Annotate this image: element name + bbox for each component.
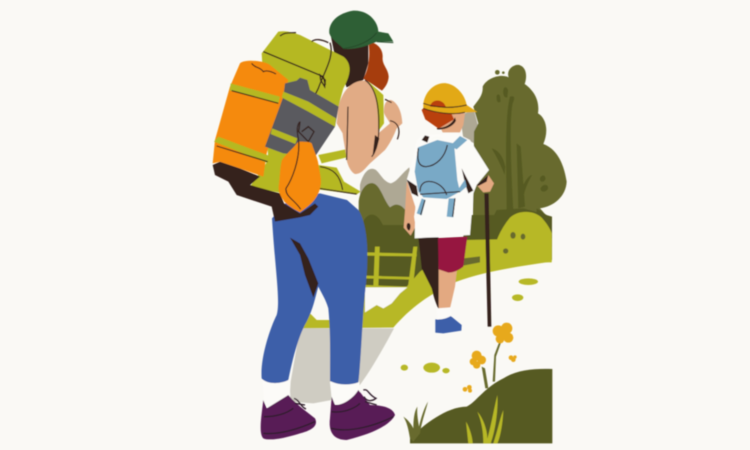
small orange bag — [279, 142, 321, 212]
right boot — [330, 390, 395, 440]
child left arm — [404, 182, 418, 236]
shirt — [407, 133, 489, 238]
large backpack — [250, 31, 350, 193]
left boot — [261, 395, 316, 439]
fence — [365, 247, 417, 287]
big tree — [473, 65, 567, 260]
child right hand — [477, 175, 494, 192]
hair — [331, 35, 368, 87]
dark grass tuft — [403, 402, 428, 442]
thigh shadow — [290, 238, 318, 298]
socks — [263, 380, 293, 412]
shoulder straps — [318, 149, 347, 163]
left bushes — [359, 183, 418, 260]
lime grass — [466, 395, 503, 443]
child — [404, 83, 494, 333]
child legs and shoe — [437, 267, 457, 310]
path shadow — [289, 328, 394, 403]
child backpack — [450, 136, 467, 149]
background hills and trees — [359, 65, 567, 260]
head and hair — [437, 110, 465, 132]
cap — [423, 83, 477, 114]
grey bottle — [265, 78, 339, 157]
white gap on path — [365, 287, 407, 312]
leggings — [261, 193, 367, 384]
green cap — [329, 11, 393, 49]
grass verge — [300, 238, 552, 328]
bush — [537, 208, 552, 238]
path pebbles — [401, 278, 538, 373]
hip belt — [318, 165, 361, 194]
orange roll — [213, 61, 288, 177]
tank top — [368, 82, 384, 133]
foreground hill, flowers and grass — [401, 278, 552, 443]
walking stick — [484, 193, 491, 327]
woman — [213, 11, 402, 222]
ground: grass, fence, path — [289, 208, 552, 403]
leggings, socks and boots — [261, 193, 395, 440]
hill — [410, 369, 552, 443]
flower stems — [482, 340, 501, 388]
dark pack underside — [213, 162, 318, 222]
torso and arm — [337, 81, 402, 174]
flowers — [463, 323, 517, 393]
